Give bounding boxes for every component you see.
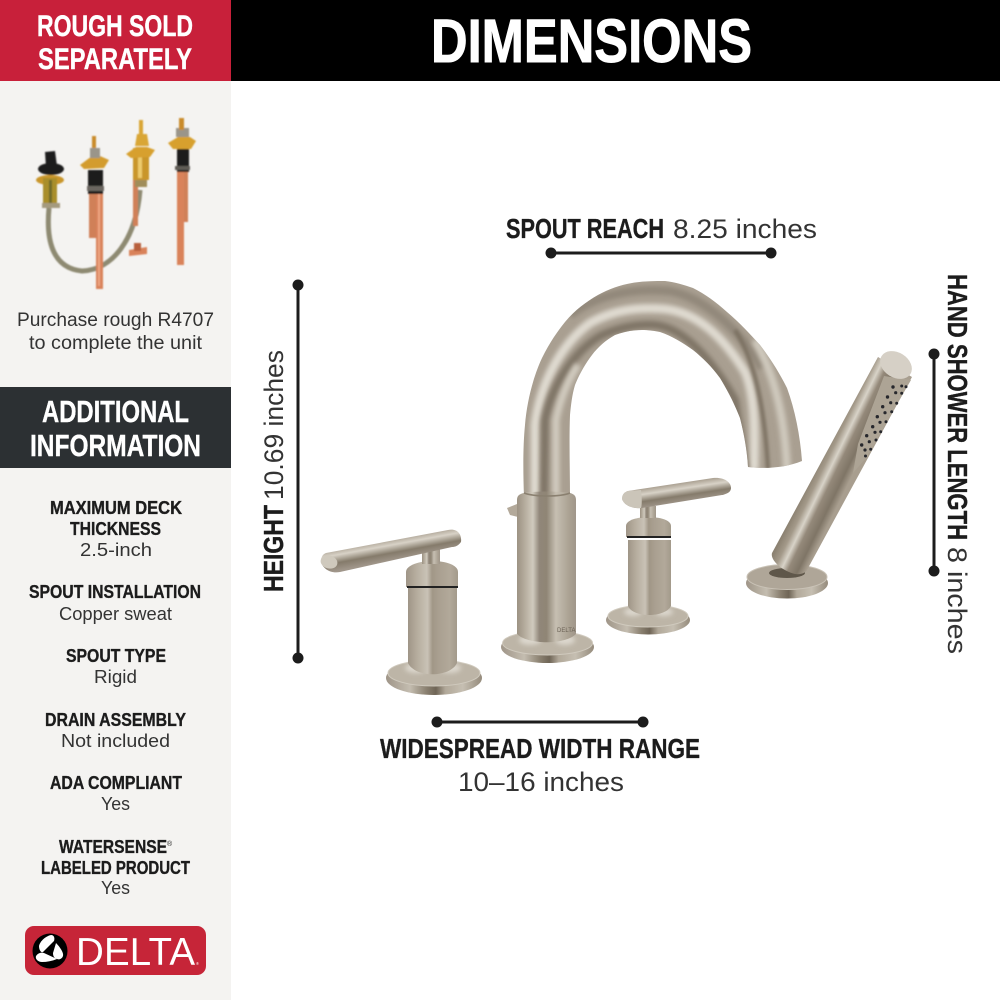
stem xyxy=(640,506,656,518)
spout arc xyxy=(523,281,802,493)
dimension line: hand shower xyxy=(928,348,940,576)
spec: spout type xyxy=(66,646,166,687)
delta logo xyxy=(25,926,206,975)
label: widespread width range: WIDESPREAD WIDTH RANGE xyxy=(380,733,700,764)
spec: watersense: ® xyxy=(167,840,173,848)
spec: drain assembly xyxy=(45,710,186,751)
rough valve photo xyxy=(36,118,196,289)
spout body xyxy=(517,492,576,642)
additional information heading xyxy=(0,387,231,468)
sidebar background xyxy=(0,81,231,1000)
spec: spout installation: Copper sweat xyxy=(59,604,172,624)
hand shower xyxy=(746,345,917,598)
dimension line: height xyxy=(292,280,304,664)
delta logo: ® xyxy=(196,961,199,966)
spec: watersense xyxy=(41,837,190,898)
red banner: rough sold separately xyxy=(0,0,231,81)
spray nozzles xyxy=(860,384,908,458)
red banner: rough sold separately: SEPARATELY xyxy=(38,43,192,76)
cap xyxy=(406,561,458,588)
spec: maximum deck thickness: MAXIMUM DECK xyxy=(50,498,182,518)
spec: ada compliant: ADA COMPLIANT xyxy=(50,773,182,793)
delta logo: DELTA xyxy=(76,931,195,974)
label: height: HEIGHT xyxy=(258,505,289,592)
spec: ada compliant xyxy=(50,773,182,814)
fourth valve xyxy=(168,118,196,265)
third valve xyxy=(126,120,155,226)
wand end cap xyxy=(875,345,917,385)
hose xyxy=(48,190,140,271)
label: hand shower length: HAND SHOWER LENGTH xyxy=(942,274,973,540)
title banner: dimensions: DIMENSIONS xyxy=(431,7,752,75)
spout flange xyxy=(501,631,594,663)
spout body: DELTA xyxy=(557,628,575,634)
spec: watersense: LABELED PRODUCT xyxy=(41,858,190,878)
label: hand shower length: 8 inches xyxy=(942,547,972,654)
title banner: dimensions xyxy=(231,0,1000,81)
spec: spout type: SPOUT TYPE xyxy=(66,646,166,666)
rough purchase note: to complete the unit xyxy=(29,333,203,354)
dimension line: width xyxy=(432,716,648,728)
spec: watersense: Yes xyxy=(101,878,130,898)
second valve xyxy=(80,136,109,289)
label: spout reach xyxy=(506,213,817,244)
label: spout reach: SPOUT REACH xyxy=(506,213,664,244)
label: height: 10.69 inches xyxy=(259,350,289,500)
delta mark xyxy=(32,934,68,968)
spec: maximum deck thickness xyxy=(50,498,182,560)
flange xyxy=(386,660,482,695)
label: spout reach: 8.25 inches xyxy=(673,214,817,244)
faucet set xyxy=(319,270,917,695)
right handle xyxy=(606,478,731,634)
body xyxy=(408,588,457,674)
rough purchase note xyxy=(17,310,214,354)
red banner: rough sold separately: ROUGH SOLD xyxy=(37,10,193,43)
rough purchase note: Purchase rough R4707 xyxy=(17,310,214,331)
base flange xyxy=(746,564,828,598)
copper tee fitting xyxy=(129,243,147,256)
spec: spout type: Rigid xyxy=(94,667,137,687)
label: widespread width range xyxy=(380,733,700,797)
lever xyxy=(319,530,461,572)
flange xyxy=(606,605,690,634)
spec: spout installation: SPOUT INSTALLATION xyxy=(29,582,201,602)
label: height xyxy=(258,350,289,592)
lever xyxy=(622,478,731,508)
spec: spout installation xyxy=(29,582,201,624)
stem xyxy=(422,549,440,564)
spec: ada compliant: Yes xyxy=(101,794,130,814)
nozzle face xyxy=(853,376,911,473)
body xyxy=(628,540,671,615)
spec: drain assembly: Not included xyxy=(61,731,170,751)
label: widespread width range: 10–16 inches xyxy=(458,767,624,797)
cap xyxy=(626,517,671,538)
spec: maximum deck thickness: 2.5-inch xyxy=(80,540,152,560)
wand xyxy=(772,357,912,574)
pop-up knob xyxy=(507,504,518,517)
dimension line: spout reach xyxy=(546,248,776,258)
spec: watersense: WATERSENSE xyxy=(59,837,167,857)
spec: maximum deck thickness: THICKNESS xyxy=(70,519,161,539)
left diverter valve xyxy=(36,151,64,208)
spec: drain assembly: DRAIN ASSEMBLY xyxy=(45,710,186,730)
additional information heading: ADDITIONAL xyxy=(42,394,189,429)
additional information heading: INFORMATION xyxy=(30,428,201,463)
left handle xyxy=(319,530,482,695)
